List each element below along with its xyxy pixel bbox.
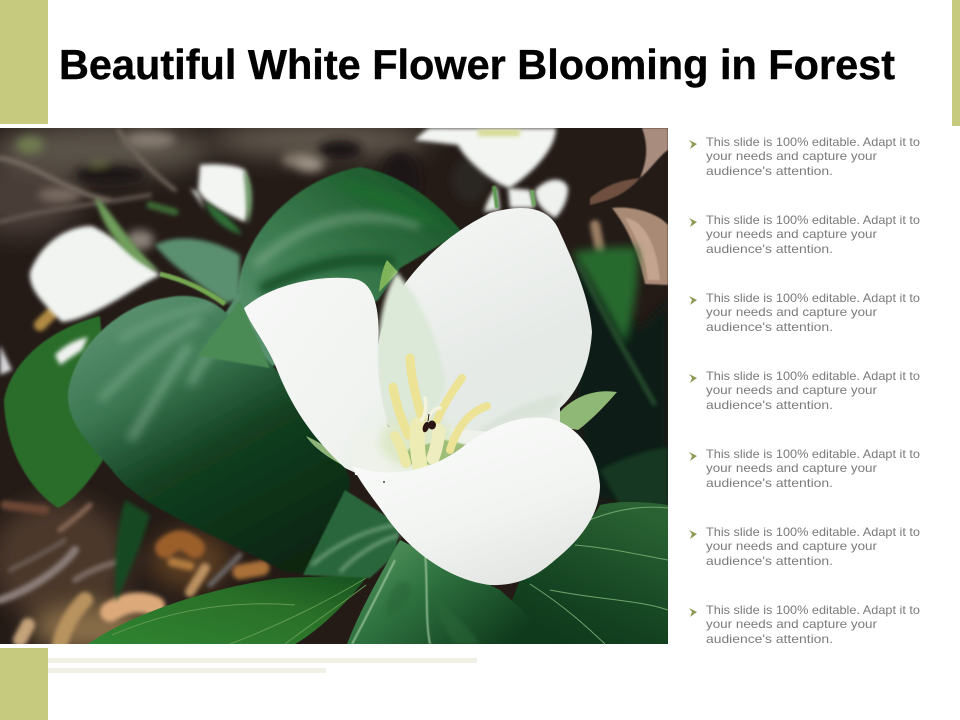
sepal: right <box>560 391 617 430</box>
petal: left <box>244 278 393 482</box>
leaf: bottom centre <box>347 540 521 644</box>
flower centre: green throat <box>400 440 472 465</box>
decorative line: short <box>48 668 326 673</box>
bullet item 2: audience's attention. <box>706 242 833 256</box>
bullet item 5: audience's attention. <box>706 476 833 490</box>
bullet item 6: audience's attention. <box>706 554 833 568</box>
bullet item 2 <box>689 213 920 256</box>
bullet item 6: This slide is 100% editable. Adapt it to <box>706 525 920 539</box>
leaf: small back leaf <box>155 238 240 303</box>
insect <box>421 414 436 433</box>
photo: white trillium flower in forest <box>0 122 668 652</box>
accent bar: top right <box>952 0 960 126</box>
leaf: large centre left <box>68 296 350 575</box>
petal: lower lobe shade <box>481 396 559 431</box>
leaf: bottom right <box>495 502 668 644</box>
leaf: under flower left <box>303 490 400 578</box>
stem <box>160 274 225 304</box>
flower centre: pale base joining petals <box>354 427 486 476</box>
bullet item 7: your needs and capture your <box>706 617 877 631</box>
bullet item 7: audience's attention. <box>706 632 833 646</box>
bullet item 6: your needs and capture your <box>706 539 877 553</box>
bullet item 3: audience's attention. <box>706 320 833 334</box>
photo background: forest floor <box>0 122 668 652</box>
bullet item 5: your needs and capture your <box>706 461 877 475</box>
bullet item 1 <box>689 135 920 178</box>
leaf: bottom left bright <box>88 575 368 644</box>
flower: blurred top <box>415 128 568 218</box>
bullet item 5 <box>689 447 920 490</box>
decorative line: long <box>48 658 477 663</box>
bullet item 4: audience's attention. <box>706 398 833 412</box>
bullet item 3: This slide is 100% editable. Adapt it to <box>706 291 920 305</box>
accent block: top left <box>0 0 48 124</box>
flower: blurred small top left <box>190 164 252 235</box>
leaf: left bright green <box>4 316 110 508</box>
petal: inner shade <box>378 272 446 440</box>
bullet item 1: This slide is 100% editable. Adapt it to <box>706 135 920 149</box>
flower: main <box>244 208 600 585</box>
petal: bottom <box>352 417 600 585</box>
leaf: upper centre <box>225 166 461 367</box>
bullet item 3: your needs and capture your <box>706 305 877 319</box>
bullet item 2: This slide is 100% editable. Adapt it to <box>706 213 920 227</box>
title: Beautiful White Flower Blooming in Forest <box>59 41 895 88</box>
leaf: dark right side <box>572 247 668 510</box>
bullet item 5: This slide is 100% editable. Adapt it to <box>706 447 920 461</box>
petal: top <box>378 208 592 432</box>
bullet item 6 <box>689 525 920 568</box>
bullet item 1: your needs and capture your <box>706 149 877 163</box>
stamens <box>393 358 487 466</box>
bullet item 7 <box>689 603 920 646</box>
bullet list <box>689 135 920 646</box>
sepal: top <box>379 260 398 292</box>
sepal: left <box>306 436 342 465</box>
flower: blurred left <box>0 198 160 375</box>
bullet item 4: your needs and capture your <box>706 383 877 397</box>
bullet item 1: audience's attention. <box>706 164 833 178</box>
bullet item 4: This slide is 100% editable. Adapt it to <box>706 369 920 383</box>
dried brown leaves <box>590 128 668 285</box>
accent block: bottom left <box>0 648 48 720</box>
leaf: hanging dark leaf <box>115 500 150 602</box>
bullet item 3 <box>689 291 920 334</box>
bullet item 4 <box>689 369 920 412</box>
bullet item 2: your needs and capture your <box>706 227 877 241</box>
bullet item 7: This slide is 100% editable. Adapt it to <box>706 603 920 617</box>
